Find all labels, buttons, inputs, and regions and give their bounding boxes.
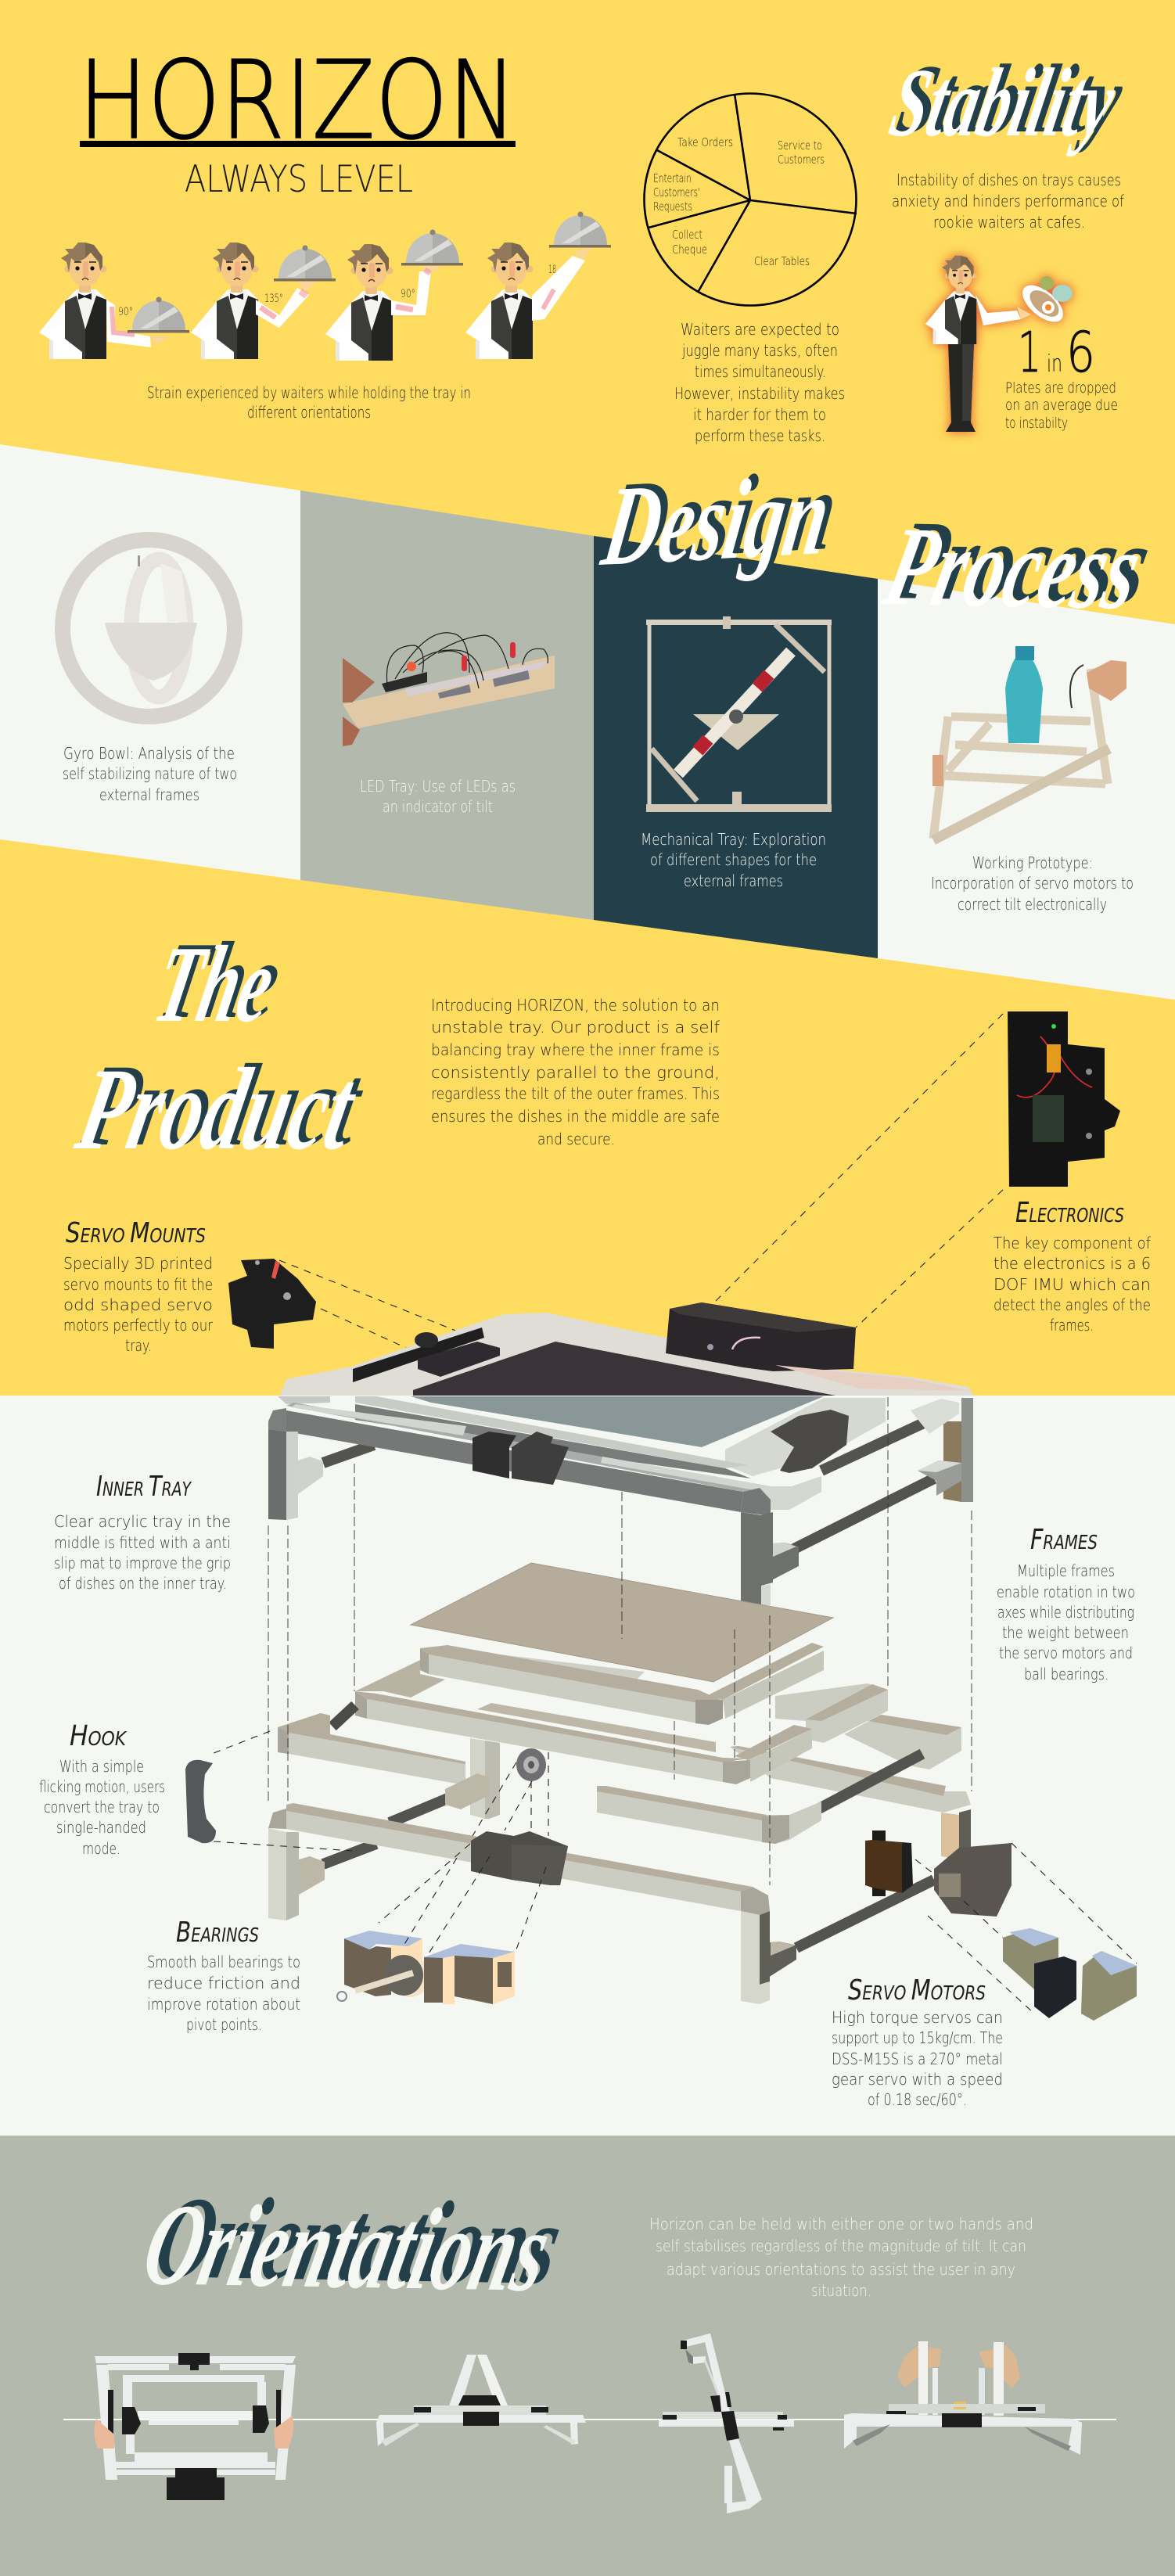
pie label: entertain customers' requests: Requests: [653, 199, 692, 214]
arrow: hook dashed leaders: [210, 1731, 352, 1851]
pie label: entertain customers' requests: Customers': [653, 185, 700, 199]
photo: orientation two posts with hands: [844, 2341, 1082, 2455]
text block: hook: single-handed: [56, 1818, 146, 1837]
text block: electronics: frames.: [1050, 1316, 1094, 1335]
caption: LED tray: an indicator of tilt: [383, 797, 493, 816]
text block: instability of dishes: anxiety and hinders performance of: [892, 192, 1124, 210]
caption: LED tray: LED Tray: Use of LEDs as: [360, 777, 516, 796]
acrylic glass top and light panel: [355, 1396, 886, 1478]
text block: servo motors: DSS-M15S is a 270° metal: [832, 2050, 1003, 2068]
caption: mechanical tray: Mechanical Tray: Exploration: [641, 830, 826, 849]
text block: servo mounts: Specially 3D printed: [63, 1254, 213, 1273]
pie label: entertain customers' requests: [653, 171, 700, 214]
photo: orientation two-handed frame: [94, 2353, 296, 2500]
caption: strain on waiters: Strain experienced by waiters while holding the tray in: [147, 383, 471, 402]
text block: electronics: [994, 1234, 1151, 1335]
heading: orientations: Orientations: [144, 2172, 573, 2308]
text block: bearings: [147, 1953, 300, 2034]
text block: waiters juggle tasks: Waiters are expected to: [681, 320, 839, 339]
text block: frames: [997, 1561, 1135, 1683]
lower centre block: [471, 1831, 568, 1885]
heading: orientations: Orientations: [132, 2179, 562, 2316]
text block: bearings: reduce friction and: [147, 1974, 300, 1992]
illustration: waiter with dropping plate: [925, 256, 1073, 432]
caption: mechanical tray: [641, 830, 826, 890]
text block: frames: ball bearings.: [1024, 1665, 1109, 1683]
pie label: clear tables: Clear Tables: [754, 254, 810, 268]
text block: introducing horizon: ensures the dishes in the middle are safe: [431, 1107, 720, 1126]
waiter at 180 degrees: [465, 211, 611, 359]
pie label: service to customers: Service to: [778, 138, 822, 153]
caption: strain on waiters: different orientations: [247, 403, 371, 422]
heading: the: The: [145, 923, 284, 1045]
text block: instability of dishes: [892, 171, 1124, 232]
outer frame front beam: [268, 1403, 821, 1605]
panel: orientations background: [0, 2136, 1175, 2576]
flange bearing: [516, 1748, 546, 1781]
waiter at 135 degrees: 135°: [264, 293, 283, 305]
clear acrylic tray: [411, 1563, 833, 1682]
heading: orientations: [132, 2172, 573, 2316]
text block: servo motors: gear servo with a speed: [832, 2070, 1003, 2089]
caption: gyro bowl: self stabilizing nature of two: [63, 764, 237, 783]
pie label: collect cheque: [672, 228, 707, 257]
text block: hook: [39, 1757, 165, 1858]
subtitle: always level: ALWAYS LEVEL: [185, 158, 413, 201]
text block: frames: Multiple frames: [1017, 1561, 1115, 1580]
panel: design process diagonal band: [0, 444, 1175, 1000]
assembled tray top above the fold: [280, 1302, 973, 1396]
background: yellow page: [0, 0, 1175, 1400]
caption: plates dropped: to instabilty: [1005, 415, 1068, 432]
title underline: [80, 141, 516, 147]
text block: waiters juggle tasks: times simultaneously.: [695, 362, 826, 381]
label heading: servo mounts: SERVO MOUNTS: [66, 1217, 206, 1249]
heading: the: The: [151, 919, 290, 1041]
waiter at 90 degrees low: [39, 243, 189, 359]
caption: mechanical tray: external frames: [684, 871, 783, 890]
fourth frame beam: [597, 1754, 922, 1844]
text block: electronics: DOF IMU which can: [994, 1275, 1151, 1294]
text block: servo mounts: servo mounts to fit the: [63, 1275, 213, 1294]
text block: frames: the servo motors and: [999, 1644, 1133, 1662]
hook part: [185, 1760, 216, 1843]
stat: 1 in 6: [1018, 320, 1095, 385]
caption: mechanical tray: of different shapes for the: [650, 850, 817, 869]
panel: gyro bowl column: [0, 444, 300, 880]
text block: orientations intro: Horizon can be held with either one or two hands and: [649, 2215, 1033, 2233]
waiter at 90 degrees raised: 90°: [401, 288, 415, 300]
stat: 1 in 6: 1: [1018, 320, 1041, 385]
caption: strain on waiters: [147, 383, 471, 422]
text block: instability of dishes: Instability of dishes on trays causes: [897, 171, 1121, 189]
text block: introducing horizon: Introducing HORIZON, the solution to an: [431, 996, 720, 1015]
exploded servo parts: [1003, 1928, 1137, 2021]
text block: inner tray: Clear acrylic tray in the: [54, 1512, 231, 1531]
right servo block: [771, 1410, 849, 1473]
photo: mechanical tray: [646, 616, 832, 812]
label heading: bearings: BEARINGS: [176, 1917, 259, 1949]
servo housing and motor: [865, 1831, 1012, 1917]
pie chart: waiter tasks: [645, 94, 857, 305]
arrow: servo dashed leaders: [915, 1843, 1137, 2014]
text block: electronics: The key component of: [994, 1234, 1151, 1252]
icon: servo mount part: [228, 1259, 316, 1349]
text block: introducing horizon: [431, 996, 720, 1148]
text block: orientations intro: self stabilises regardless of the magnitude of tilt. It can: [656, 2236, 1026, 2255]
waiter at 180 degrees: 18: [548, 264, 556, 276]
text block: waiters juggle tasks: it harder for them to: [693, 405, 826, 424]
photo: working prototype: [932, 646, 1126, 840]
heading: product: Product: [74, 1040, 374, 1170]
arrow: electronics dashed leaders: [708, 1014, 1003, 1328]
panel: mechanical tray column: [594, 536, 878, 958]
arrow: bearing dashed leaders: [379, 1752, 548, 1957]
text block: servo motors: High torque servos can: [832, 2008, 1003, 2027]
heading: design: Design: [595, 451, 838, 590]
panel: working prototype column: [878, 579, 1175, 1000]
text block: servo mounts: [63, 1254, 214, 1355]
text block: inner tray: of dishes on the inner tray.: [59, 1574, 227, 1593]
text block: instability of dishes: rookie waiters at cafes.: [933, 213, 1085, 232]
text block: hook: convert the tray to: [44, 1798, 160, 1816]
exploded bearing blocks: [337, 1931, 515, 2004]
text block: hook: flicking motion, users: [39, 1777, 165, 1796]
text block: hook: mode.: [82, 1839, 120, 1858]
text block: frames: enable rotation in two: [997, 1583, 1135, 1601]
caption: LED tray: [360, 777, 516, 816]
icon: gyro bowl: [63, 540, 235, 717]
arrow: vertical dashed assembly guides: [268, 1397, 972, 1885]
horizon line: [63, 2419, 1116, 2420]
pie label: entertain customers' requests: Entertain: [653, 171, 692, 185]
text block: frames: axes while distributing: [997, 1603, 1134, 1622]
caption: gyro bowl: Gyro Bowl: Analysis of the: [63, 744, 235, 763]
caption: plates dropped: Plates are dropped: [1005, 379, 1116, 397]
hook side frame: [278, 1705, 465, 1785]
waiter at 90 degrees raised: [325, 230, 463, 361]
text block: inner tray: slip mat to improve the grip: [54, 1554, 231, 1572]
vertical post and bracket: [323, 1738, 500, 1864]
text block: introducing horizon: consistently parallel to the ground,: [431, 1063, 720, 1082]
pie label: service to customers: [778, 138, 825, 167]
stat: 1 in 6: in: [1047, 350, 1062, 378]
heading: design: Design: [602, 446, 845, 585]
panel: exploded view background: [0, 1396, 1175, 2136]
text block: servo motors: [832, 2008, 1003, 2109]
heading: product: Product: [66, 1044, 367, 1174]
pie label: service to customers: Customers: [778, 153, 825, 167]
text block: introducing horizon: balancing tray where the inner frame is: [431, 1040, 720, 1059]
stacked rear frame parts: [730, 1683, 971, 1859]
diagram: exploded tray assembly: [185, 1302, 1137, 2021]
caption: plates dropped: [1005, 379, 1118, 432]
caption: plates dropped: on an average due: [1005, 397, 1118, 414]
text block: servo mounts: odd shaped servo: [63, 1295, 213, 1314]
text block: bearings: pivot points.: [186, 2015, 262, 2034]
third frame: [355, 1691, 812, 1784]
label heading: hook: HOOK: [70, 1720, 128, 1752]
text block: electronics: the electronics is a 6: [994, 1254, 1151, 1273]
caption: working prototype: Working Prototype:: [972, 853, 1093, 872]
inner frame: [355, 1643, 824, 1725]
text block: waiters juggle tasks: However, instability makes: [674, 384, 845, 403]
icon: electronics box: [1008, 1011, 1120, 1187]
text block: servo mounts: motors perfectly to our: [63, 1316, 214, 1335]
text block: introducing horizon: and secure.: [537, 1130, 615, 1148]
waiter at 135 degrees: [191, 243, 336, 359]
centre servo block: [473, 1432, 569, 1485]
label heading: electronics: ELECTRONICS: [1015, 1197, 1124, 1229]
text block: bearings: improve rotation about: [147, 1995, 300, 2014]
text block: orientations intro: [649, 2215, 1033, 2300]
text block: frames: the weight between: [1002, 1623, 1129, 1642]
text block: inner tray: middle is fitted with a anti: [54, 1533, 231, 1552]
panel: LED tray column: [300, 490, 594, 920]
photo: orientation folded A frame: [376, 2355, 586, 2446]
text block: waiters juggle tasks: [674, 320, 845, 445]
caption: gyro bowl: external frames: [99, 785, 199, 804]
lower outer frame: [268, 1803, 934, 2004]
stat: 1 in 6: 6: [1066, 320, 1095, 385]
label heading: frames: FRAMES: [1030, 1524, 1098, 1556]
text block: servo mounts: tray.: [125, 1336, 152, 1355]
waiter at 90 degrees low: 90°: [118, 306, 133, 318]
text block: waiters juggle tasks: juggle many tasks, often: [681, 341, 838, 360]
photo: LED tray: [343, 633, 555, 746]
text block: bearings: Smooth ball bearings to: [147, 1953, 300, 1971]
text block: servo motors: of 0.18 sec/60°.: [868, 2090, 967, 2109]
arrow: servo mount dashed leaders: [279, 1260, 469, 1353]
text block: orientations intro: adapt various orientations to assist the user in any: [667, 2260, 1015, 2279]
label heading: inner tray: INNER TRAY: [96, 1471, 192, 1503]
text block: orientations intro: situation.: [811, 2281, 871, 2300]
text block: waiters juggle tasks: perform these tasks.: [695, 426, 825, 445]
pie label: collect cheque: Cheque: [672, 243, 707, 257]
caption: working prototype: [931, 853, 1134, 914]
label heading: servo motors: SERVO MOTORS: [848, 1974, 986, 2007]
text block: introducing horizon: unstable tray. Our product is a self: [431, 1018, 720, 1037]
text block: servo motors: support up to 15kg/cm. The: [832, 2028, 1003, 2047]
pie label: take orders: Take Orders: [677, 135, 733, 149]
caption: gyro bowl: [63, 744, 237, 804]
photo: orientation side tilt: [659, 2333, 794, 2513]
pie label: collect cheque: Collect: [672, 228, 702, 242]
assembled rear frame: [278, 1396, 973, 1549]
title: HORIZON: HORIZON: [78, 38, 517, 163]
text block: introducing horizon: regardless the tilt of the outer frames. This: [431, 1084, 720, 1103]
caption: working prototype: correct tilt electronically: [958, 895, 1107, 914]
text block: inner tray: [54, 1512, 231, 1593]
text block: hook: With a simple: [59, 1757, 144, 1776]
illustration: four waiters holding trays: [39, 211, 611, 361]
